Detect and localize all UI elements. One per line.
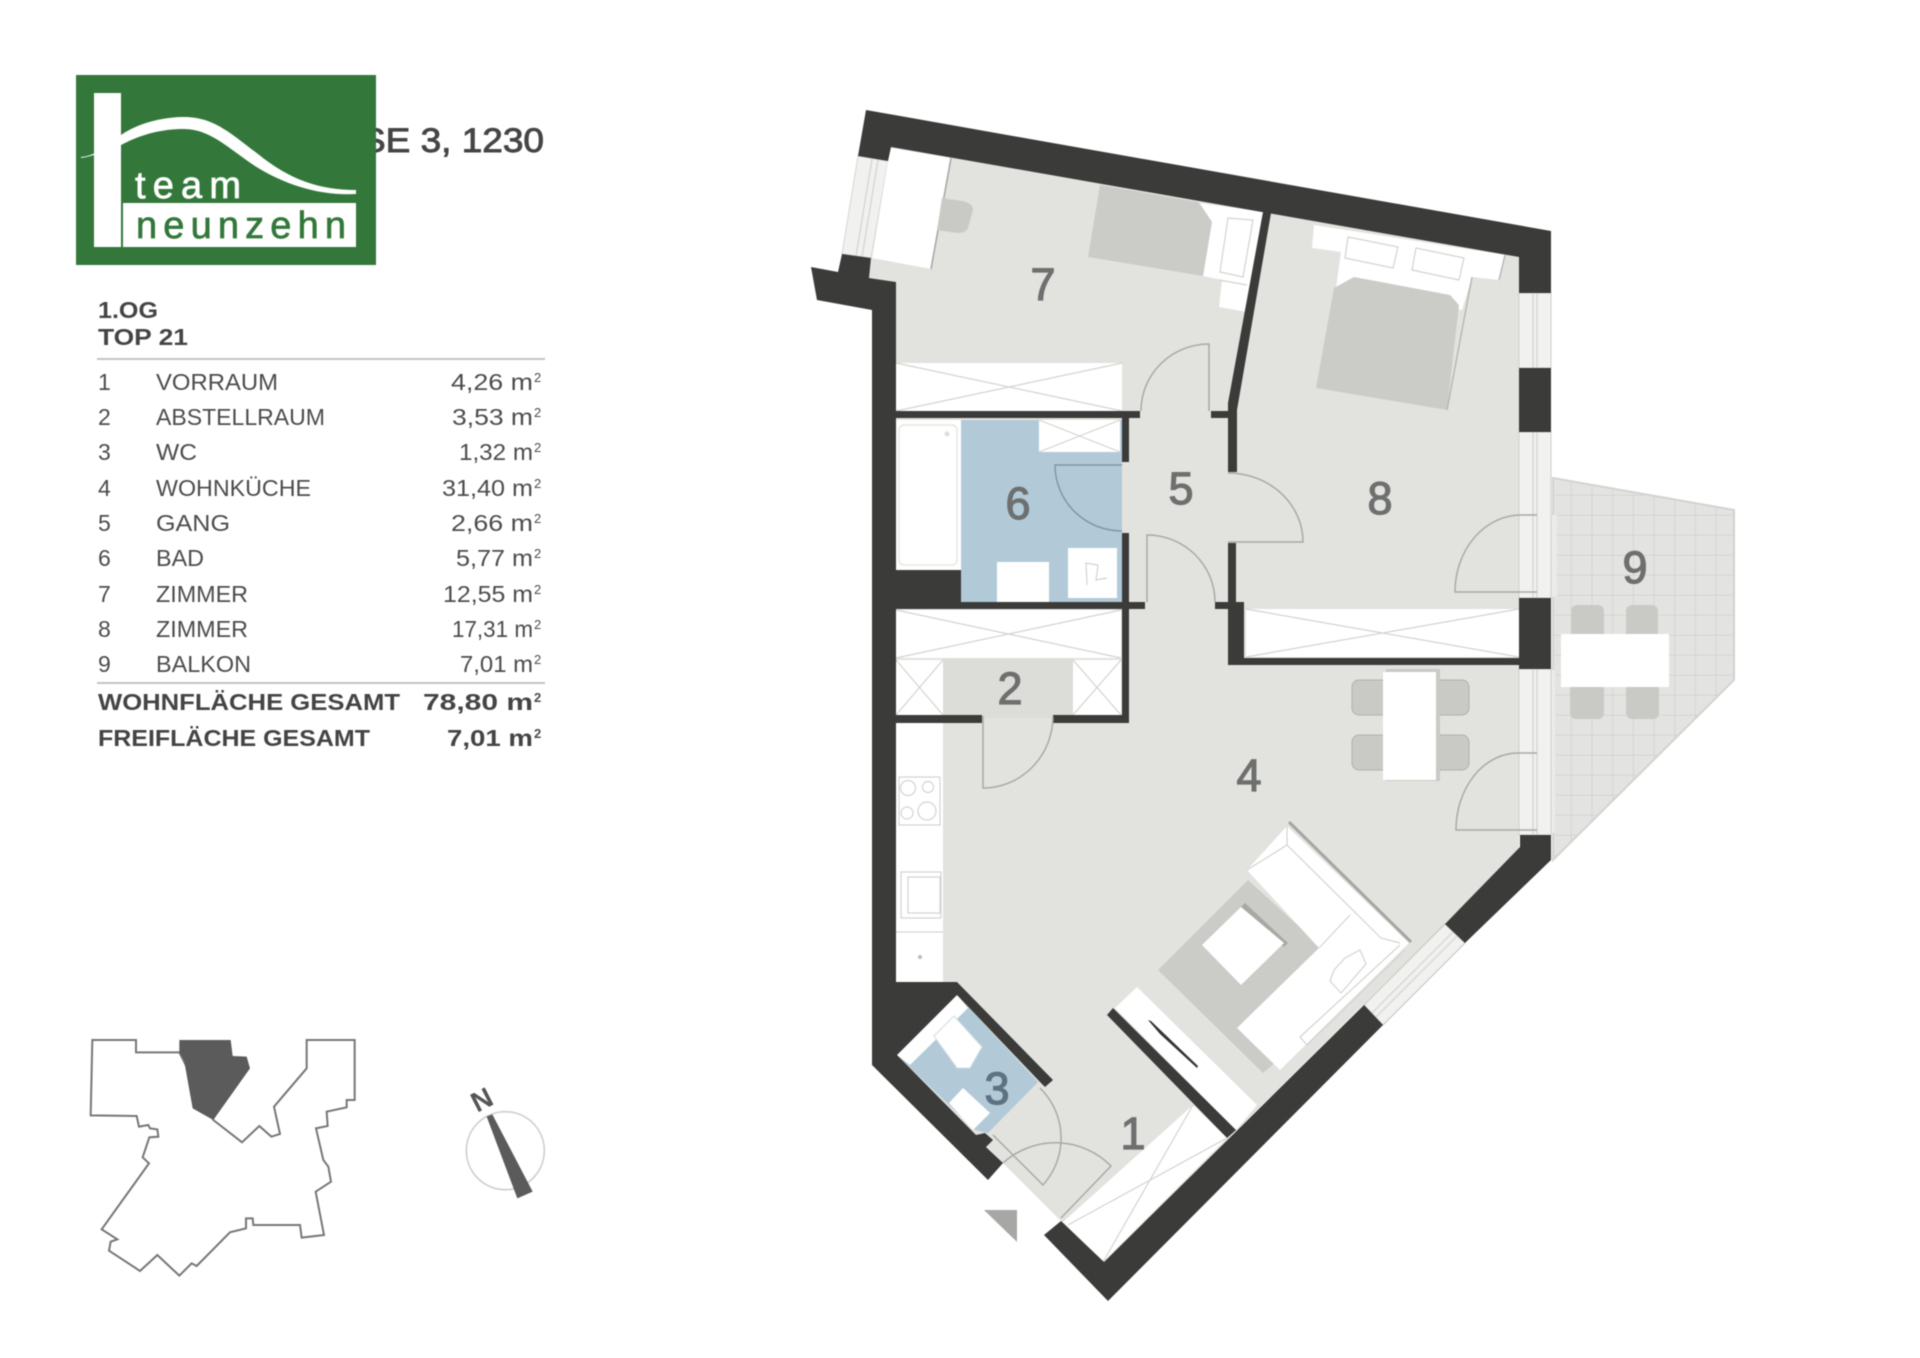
compass — [466, 1081, 544, 1198]
apartment heading — [98, 297, 188, 350]
room numbers: 7 — [1030, 259, 1056, 310]
row 4: 2 — [534, 476, 541, 491]
row 2: 3,53 m — [452, 404, 533, 430]
row 3: 1,32 m — [459, 439, 533, 465]
total outdoor area: FREIFLÄCHE GESAMT — [98, 725, 370, 751]
room 9: balcony — [1537, 478, 1734, 860]
room 8 wardrobe — [1246, 609, 1519, 657]
bath tub — [896, 420, 961, 570]
exterior and interior walls — [811, 110, 1551, 1301]
row 1: 1 — [98, 369, 111, 395]
row 6 — [98, 545, 541, 571]
bath storage — [1039, 420, 1120, 452]
row 8: 17,31 m — [452, 616, 533, 642]
row 9: 7,01 m — [460, 651, 533, 677]
row 6: 6 — [98, 545, 111, 571]
row 2: 2 — [98, 404, 111, 430]
row 3: 2 — [534, 440, 541, 455]
balcony table and chairs — [1561, 605, 1669, 719]
total living area — [98, 689, 541, 715]
room numbers: 5 — [1168, 463, 1194, 514]
row 2 — [98, 404, 541, 430]
room 7 bed — [1088, 185, 1263, 312]
panel: floor plan — [811, 110, 1734, 1301]
row 4 — [98, 475, 541, 501]
room numbers: 9 — [1622, 542, 1648, 593]
row 1 — [98, 369, 541, 395]
total outdoor area: 2 — [534, 726, 541, 741]
dining table and chairs — [1352, 669, 1469, 781]
room numbers: 2 — [997, 663, 1023, 714]
row 8: ZIMMER — [156, 616, 248, 642]
address heading: SE 3, 1230 — [361, 122, 544, 160]
living room rug, coffee table and sofa — [1158, 822, 1411, 1073]
room 6: bathroom — [896, 420, 1122, 602]
row 5: GANG — [156, 510, 230, 536]
row 8: 2 — [534, 617, 541, 632]
room numbers: 8 — [1367, 473, 1393, 524]
row 5: 5 — [98, 510, 111, 536]
row 4: 4 — [98, 475, 111, 501]
row 7: ZIMMER — [156, 581, 248, 607]
row 1: 4,26 m — [451, 369, 533, 395]
kitchen counter — [896, 723, 943, 982]
row 3: WC — [156, 439, 197, 465]
row 1: VORRAUM — [156, 369, 278, 395]
compass: N — [466, 1081, 498, 1118]
row 7: 12,55 m — [443, 581, 533, 607]
apartment heading: 1.OG — [98, 297, 158, 323]
row 1: 2 — [534, 370, 541, 385]
row 3: 3 — [98, 439, 111, 465]
row 9 — [98, 651, 541, 677]
room 2: storage shelves — [896, 610, 1121, 718]
logo: team neunzehn — [76, 75, 376, 265]
row 9: 2 — [534, 652, 541, 667]
row 5: 2,66 m — [451, 510, 533, 536]
room 7 desk and window — [842, 148, 973, 269]
row 2: ABSTELLRAUM — [156, 404, 325, 430]
highlighted apartment — [179, 1040, 250, 1120]
room 7 wardrobe — [896, 363, 1122, 411]
row 6: BAD — [156, 545, 204, 571]
row 7: 7 — [98, 581, 111, 607]
total outdoor area: 7,01 m — [447, 725, 533, 751]
row 5: 2 — [534, 511, 541, 526]
row 4: WOHNKÜCHE — [156, 475, 311, 501]
row 6: 2 — [534, 546, 541, 561]
total living area: 2 — [534, 690, 541, 705]
windows — [1364, 293, 1551, 1025]
room numbers: 1 — [1120, 1108, 1146, 1159]
logo: team neunzehn: neunzehn — [136, 205, 346, 247]
row 8 — [98, 616, 541, 642]
row 4: 31,40 m — [442, 475, 533, 501]
entry wardrobe — [1063, 1105, 1227, 1262]
row 2: 2 — [534, 405, 541, 420]
row 9: BALKON — [156, 651, 251, 677]
row 8: 8 — [98, 616, 111, 642]
door swings — [983, 344, 1537, 1218]
entry wardrobe partition — [1107, 987, 1257, 1138]
bath sink — [997, 562, 1049, 602]
room numbers: 3 — [984, 1063, 1010, 1114]
row 5 — [98, 510, 541, 536]
total outdoor area — [98, 725, 541, 751]
room 3: WC — [897, 995, 1038, 1133]
apartment floor — [869, 147, 1519, 1262]
building key plan — [91, 1040, 355, 1276]
room 8 bed — [1312, 225, 1505, 410]
room numbers — [984, 259, 1648, 1159]
room area table — [97, 359, 545, 751]
row 9: 9 — [98, 651, 111, 677]
total living area: WOHNFLÄCHE GESAMT — [98, 689, 400, 715]
row 7: 2 — [534, 582, 541, 597]
row 7 — [98, 581, 541, 607]
icon: entrance marker — [984, 1210, 1017, 1242]
bath toilet — [1068, 548, 1117, 598]
row 3 — [98, 439, 541, 465]
logo: team neunzehn: team — [135, 165, 241, 207]
room numbers: 4 — [1236, 750, 1262, 801]
row 6: 5,77 m — [456, 545, 533, 571]
room numbers: 6 — [1005, 478, 1031, 529]
apartment heading: TOP 21 — [98, 324, 188, 350]
total living area: 78,80 m — [423, 689, 533, 715]
